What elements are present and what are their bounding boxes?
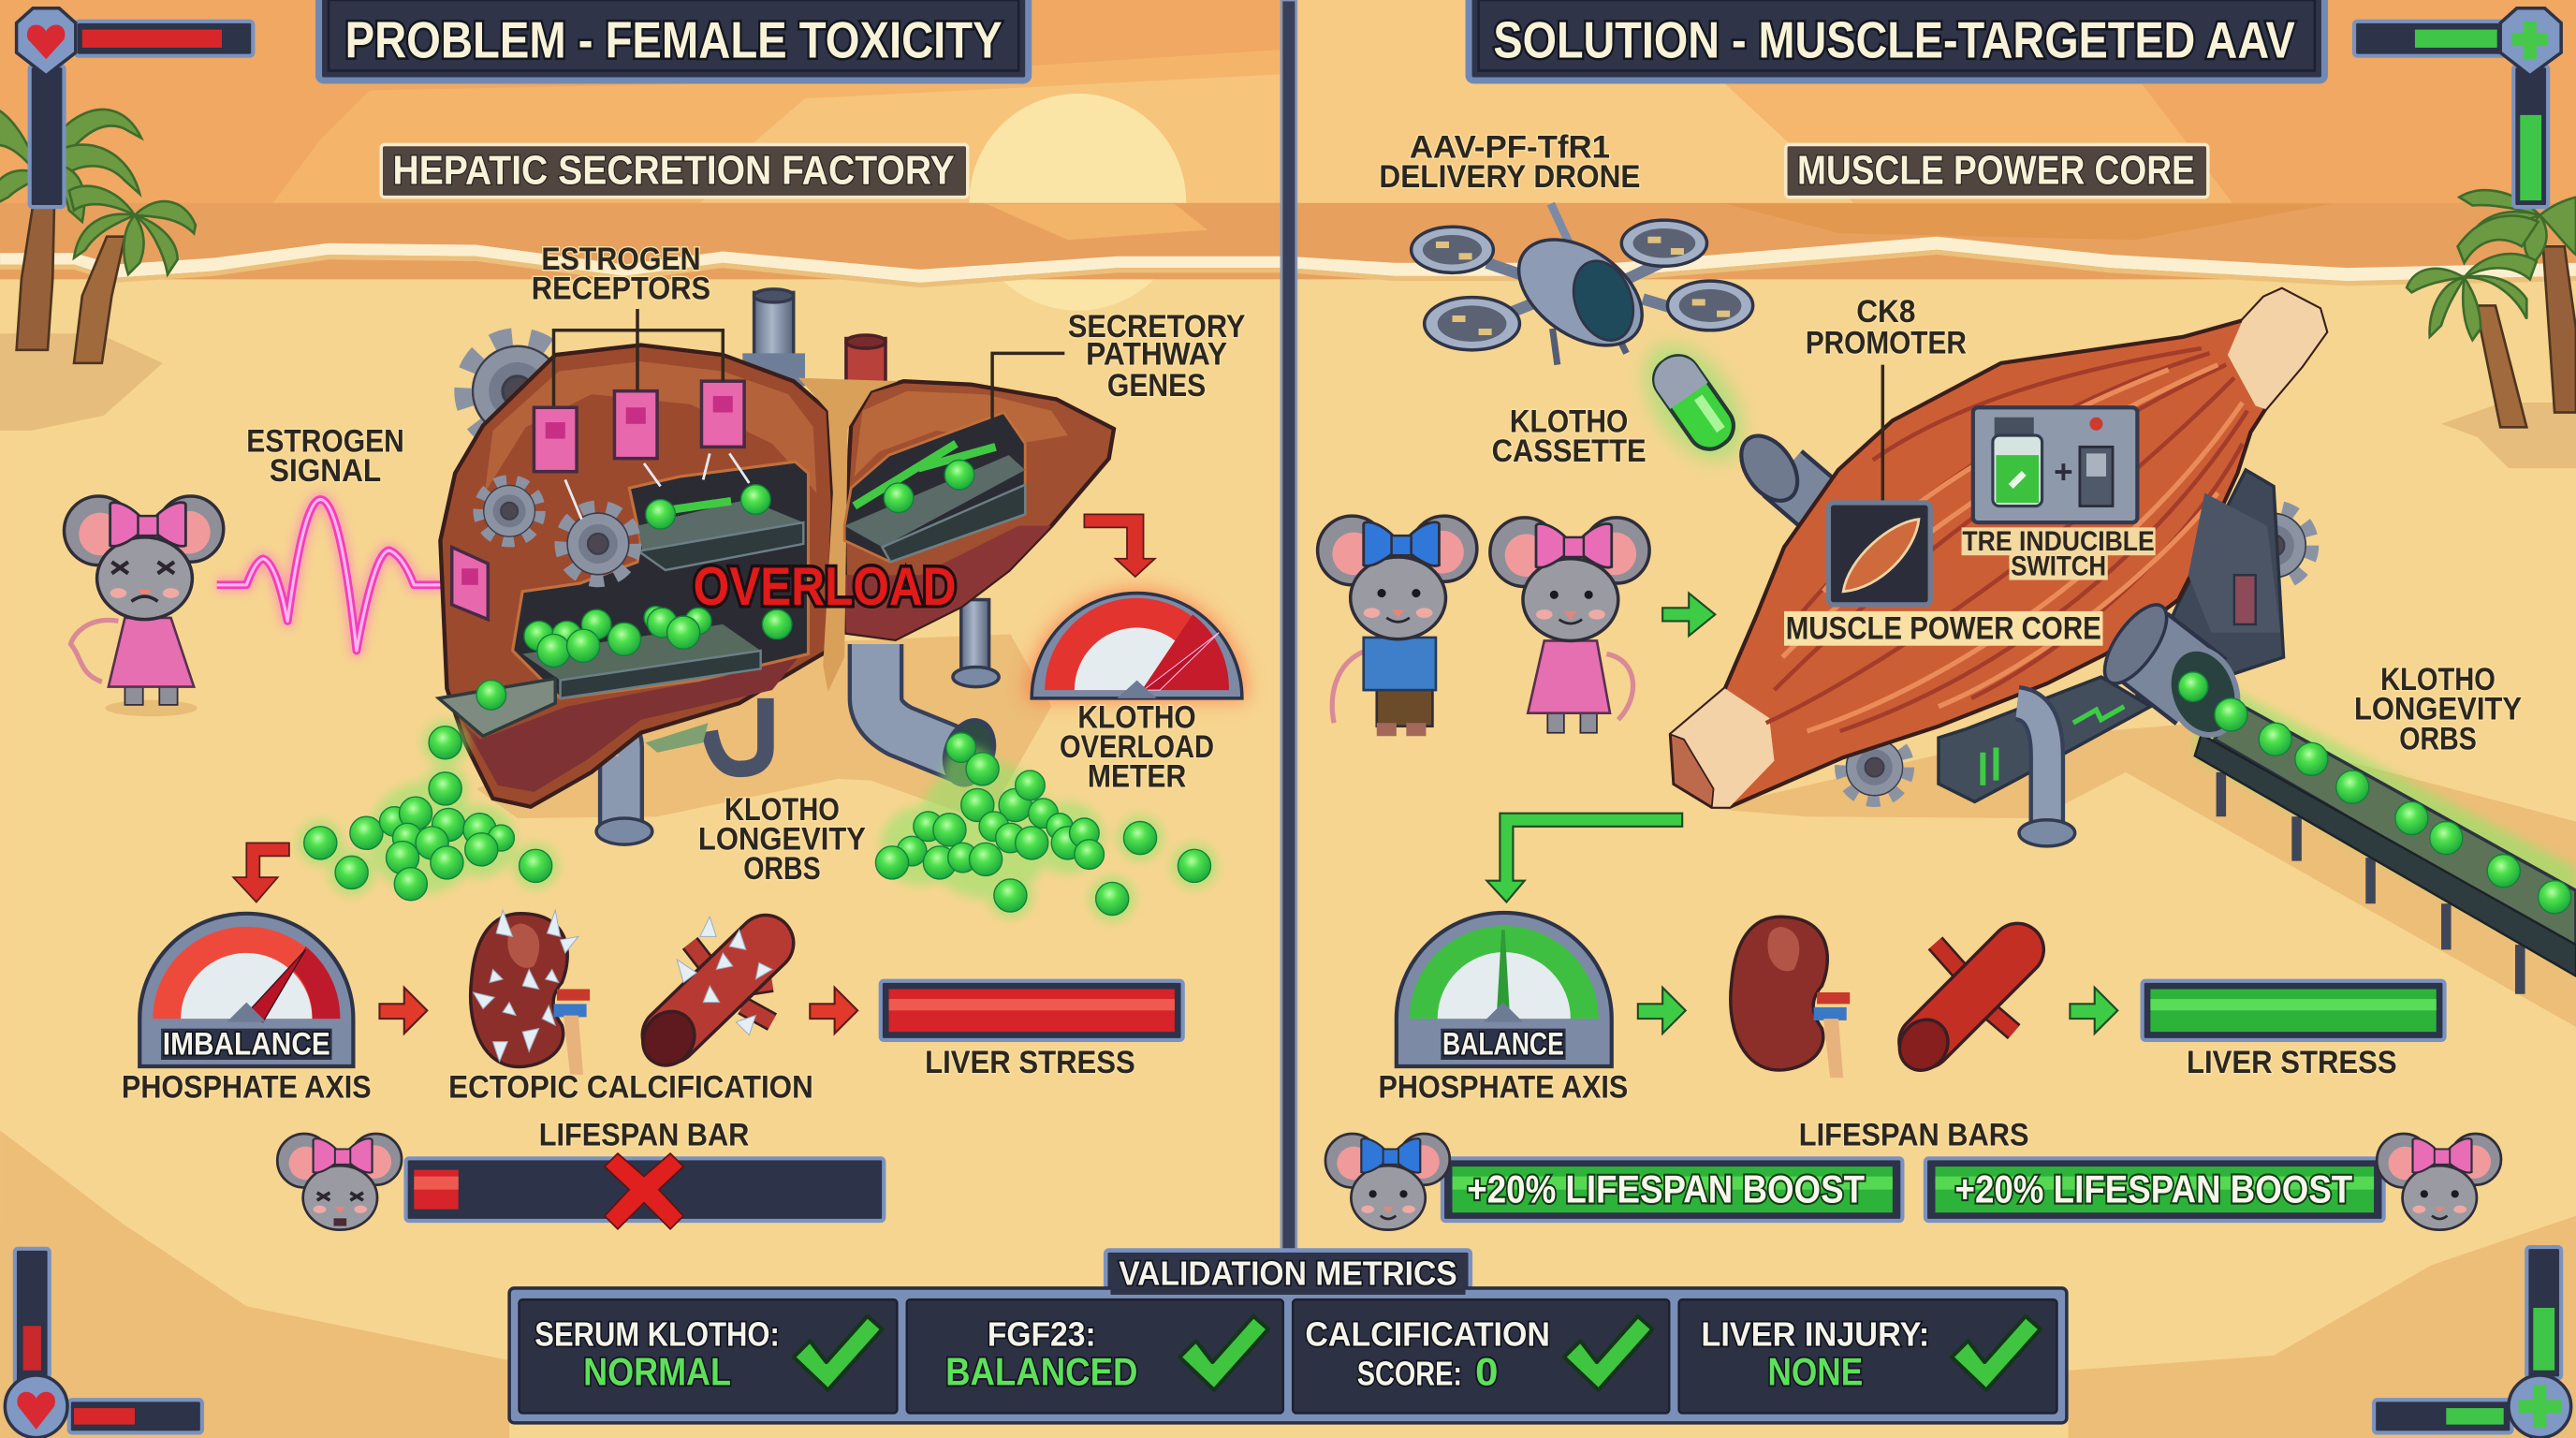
- klotho cassette label: KLOTHO: [1510, 404, 1628, 440]
- validation metrics heading: VALIDATION METRICS: [1119, 1254, 1457, 1292]
- lifespan boost bar, female: [1925, 1158, 2384, 1221]
- metric: serum klotho: [520, 1299, 897, 1413]
- klotho cassette label: CASSETTE: [1492, 433, 1647, 469]
- metric: FGF23: FGF23:: [988, 1314, 1096, 1353]
- muscle power core label: MUSCLE POWER CORE: [1786, 611, 2101, 647]
- estrogen receptors label: ESTROGEN: [541, 242, 701, 277]
- female mouse: [1490, 518, 1649, 733]
- receptor sparks: [565, 453, 749, 520]
- phosphate gauge: imbalance: IMBALANCE: [163, 1027, 330, 1063]
- green arrow to muscle: [1662, 594, 1715, 636]
- estrogen signal label: ESTROGEN: [246, 424, 404, 460]
- delivery drone label: AAV-PF-TfR1: [1410, 129, 1610, 165]
- lifespan bar label: LIFESPAN BAR: [539, 1117, 750, 1152]
- metric: liver injury: LIVER INJURY:: [1701, 1314, 1929, 1353]
- TRE inducible switch label: [1962, 526, 2156, 581]
- phosphate gauge: imbalance: [139, 914, 353, 1066]
- arrow to ectopic calcification: [379, 988, 427, 1034]
- metric: calcification score: 0: [1475, 1349, 1499, 1393]
- healthy kidney: [1731, 917, 1850, 1078]
- green arrow to phosphate gauge: [1486, 814, 1682, 902]
- HUD: top-left health meter: [17, 8, 253, 207]
- muscle power core: [1671, 289, 2326, 807]
- title: solution: [1469, 0, 2324, 81]
- klotho longevity orbs label, left: [698, 792, 866, 887]
- orb piles, left: [298, 720, 1218, 922]
- HUD: bottom-right health meter: [2374, 1247, 2571, 1438]
- overload warning: OVERLOAD: [694, 557, 956, 617]
- happy male mouse head icon: [1325, 1134, 1450, 1230]
- muscle front machinery: outlet pipe, support leg: [2017, 493, 2280, 846]
- klotho orb conveyor: [2157, 638, 2576, 994]
- liver stress label, left: LIVER STRESS: [925, 1045, 1135, 1080]
- title: problem: PROBLEM - FEMALE TOXICITY: [345, 11, 1003, 68]
- TRE inducible switch label: TRE INDUCIBLE: [1962, 526, 2155, 557]
- klotho longevity orbs label, left: KLOTHO: [724, 792, 840, 828]
- delivery drone label: DELIVERY DRONE: [1379, 159, 1640, 195]
- lifespan boost bar, male: +20% LIFESPAN BOOST: [1467, 1167, 1865, 1211]
- CK8 promoter label: [1806, 294, 1967, 503]
- subtitle: hepatic secretion factory: HEPATIC SECRETION FACTORY: [393, 148, 955, 194]
- HUD: bottom-left health meter: [5, 1249, 202, 1438]
- lifespan bars label: LIFESPAN BARS: [1799, 1117, 2029, 1152]
- delivery drone label: [1379, 129, 1640, 195]
- lower conveyor: [522, 624, 761, 681]
- estrogen receptor switches: [452, 381, 744, 620]
- klotho longevity orbs label, right: [2354, 662, 2522, 756]
- estrogen receptors label: RECEPTORS: [532, 271, 710, 306]
- klotho cassette capsule: [1625, 327, 1763, 478]
- calcified kidney: [471, 910, 590, 1075]
- metric: calcification score: [1293, 1299, 1669, 1413]
- ectopic calcification label: ECTOPIC CALCIFICATION: [448, 1069, 813, 1105]
- metric: FGF23: BALANCED: [945, 1349, 1137, 1393]
- lifespan bar: nearly empty: [406, 1153, 884, 1229]
- muscle icon panel: [1828, 503, 1930, 605]
- klotho longevity orbs label, left: ORBS: [743, 851, 821, 887]
- sad mouse head icon: [277, 1134, 402, 1230]
- arrow to healthy organs: [1638, 988, 1686, 1034]
- factory orbs: [476, 460, 974, 710]
- klotho overload meter label: [1060, 699, 1214, 795]
- internal gears: [478, 479, 540, 542]
- gear behind liver: [463, 336, 572, 446]
- klotho overload meter label: OVERLOAD: [1060, 729, 1214, 765]
- healthy blood vessel: [1890, 943, 2017, 1079]
- arrow to overload meter: [1084, 514, 1155, 577]
- muscle machinery behind: [1730, 425, 2313, 801]
- metric: liver injury: [1679, 1299, 2056, 1413]
- ligament: [798, 378, 899, 692]
- arrow to phosphate gauge, left: [233, 843, 289, 902]
- klotho overload meter label: METER: [1088, 759, 1186, 795]
- liver factory: [439, 289, 1114, 844]
- CK8 promoter label: PROMOTER: [1806, 325, 1967, 360]
- lifespan boost bar, female: +20% LIFESPAN BOOST: [1955, 1167, 2352, 1211]
- arrow to liver stress: [810, 988, 857, 1034]
- klotho overload meter label: KLOTHO: [1077, 699, 1196, 735]
- klotho longevity orbs label, left: LONGEVITY: [698, 821, 866, 857]
- delivery drone: [1412, 204, 1753, 367]
- estrogen receptors label: [532, 242, 723, 405]
- metric: serum klotho: SERUM KLOTHO:: [534, 1314, 780, 1353]
- upper conveyor: [637, 500, 803, 550]
- happy female mouse head icon: [2377, 1134, 2501, 1230]
- right lobe: [844, 381, 1114, 639]
- TRE inducible switch panel: +: [2054, 454, 2073, 491]
- phosphate axis label, left: PHOSPHATE AXIS: [122, 1069, 372, 1105]
- CK8 promoter label: CK8: [1856, 294, 1915, 330]
- left lobe: [440, 345, 833, 807]
- calcified blood vessel: [633, 917, 772, 1076]
- centre divider: [1281, 0, 1296, 1257]
- palm trees right: [2407, 190, 2576, 427]
- klotho longevity orbs label, right: ORBS: [2399, 721, 2477, 756]
- liver stress bar: red: [881, 981, 1183, 1040]
- HUD: top-right health meter: [2354, 8, 2561, 207]
- secretory pathway genes label: SECRETORY: [1068, 309, 1246, 345]
- estrogen signal wave: [217, 500, 444, 651]
- metric: serum klotho: NORMAL: [583, 1349, 731, 1393]
- estrogen signal label: [246, 424, 404, 489]
- estrogen signal label: SIGNAL: [270, 453, 381, 489]
- metric: FGF23: [907, 1299, 1283, 1413]
- klotho cassette label: [1492, 404, 1647, 469]
- factory window: [513, 462, 809, 698]
- klotho longevity orbs label, right: KLOTHO: [2380, 662, 2496, 697]
- male mouse: [1318, 516, 1477, 736]
- metric: liver injury: NONE: [1767, 1349, 1863, 1393]
- klotho overload meter: [1027, 590, 1247, 700]
- secretory pathway genes label: GENES: [1107, 368, 1206, 404]
- title: problem: [319, 0, 1029, 81]
- liver stress bar: green: [2143, 981, 2445, 1040]
- secretory pathway genes label: [992, 309, 1246, 420]
- male and female mice, happy: [1318, 516, 1649, 736]
- phosphate gauge: balance: BALANCE: [1442, 1027, 1564, 1063]
- arrow to liver stress, right: [2070, 988, 2117, 1034]
- metric: calcification score: SCORE:: [1357, 1354, 1462, 1392]
- TRE inducible switch panel: [1973, 407, 2137, 522]
- sad female mouse: [65, 496, 224, 716]
- liver stress label, right: LIVER STRESS: [2187, 1045, 2397, 1080]
- secretory window: [844, 413, 1025, 562]
- phosphate axis label, right: PHOSPHATE AXIS: [1379, 1069, 1628, 1105]
- klotho longevity orbs label, right: LONGEVITY: [2354, 692, 2522, 727]
- validation metrics panel: [509, 1251, 2067, 1423]
- secretory pathway genes label: PATHWAY: [1086, 337, 1227, 373]
- phosphate gauge: balance: [1397, 913, 1612, 1066]
- metric: calcification score: CALCIFICATION: [1305, 1314, 1550, 1353]
- palm trees left: [0, 107, 196, 363]
- subtitle: muscle power core: MUSCLE POWER CORE: [1797, 148, 2195, 194]
- TRE inducible switch label: SWITCH: [2011, 550, 2106, 581]
- pipes behind liver: [596, 289, 1003, 844]
- lifespan boost bar, male: [1442, 1158, 1902, 1221]
- title: solution: SOLUTION - MUSCLE-TARGETED AAV: [1493, 11, 2295, 68]
